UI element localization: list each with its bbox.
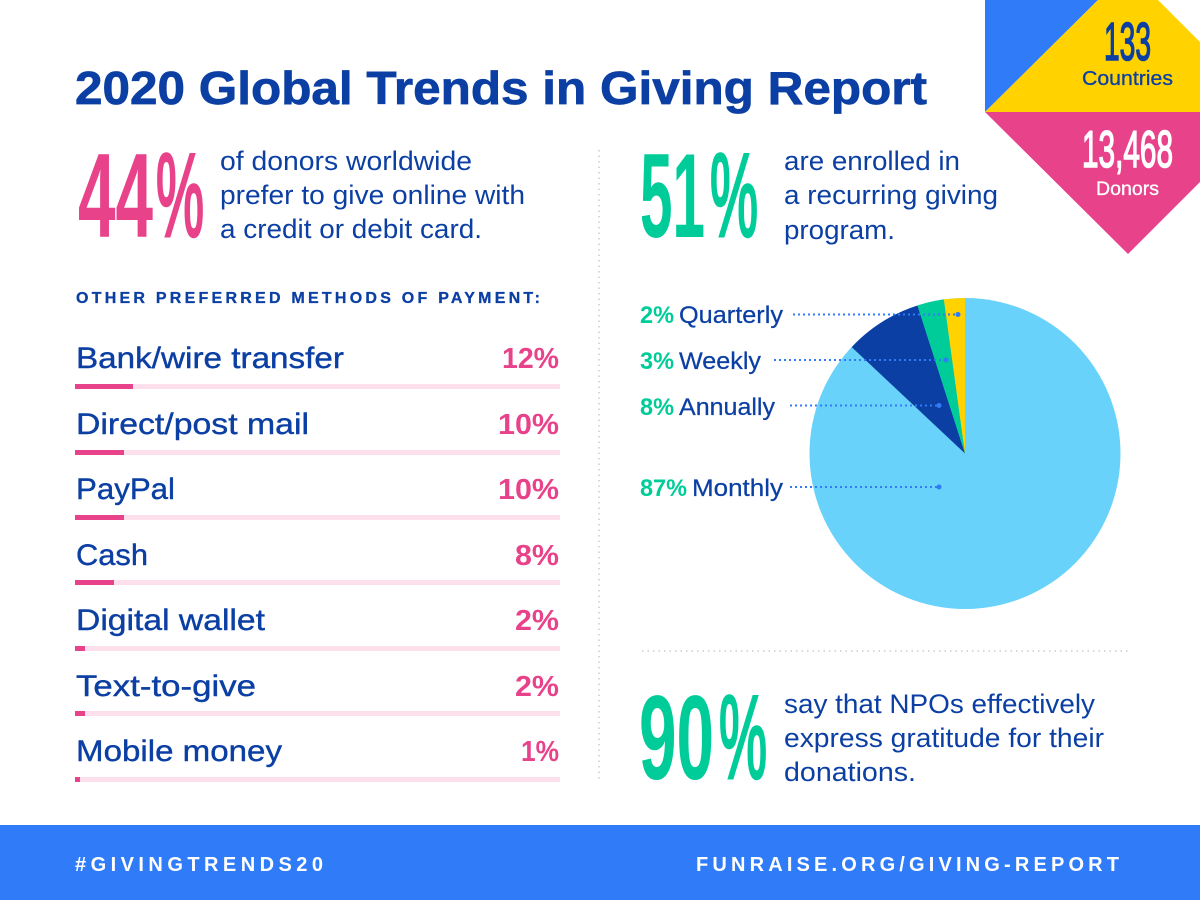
text: gratitude: say that NPOs effectively [784,689,1096,719]
text: online card preference: prefer to give online with [220,180,525,210]
slice: quarterly 2% [944,298,965,454]
row: direct/post mail: Direct/post mail [76,408,309,441]
row: digital wallet: 2% [515,605,559,637]
text: online card preference: a credit or debit card. [220,214,482,244]
row: mobile money: Mobile money [76,735,282,768]
footer bar [0,825,1200,900]
row: digital wallet: Digital wallet [76,604,266,637]
label: donors: Donors [1096,179,1159,200]
text: recurring giving: are enrolled in [784,146,960,176]
text: gratitude: express gratitude for their [784,723,1104,753]
pie chart: giving frequency [810,298,1120,609]
text: gratitude [784,689,1104,787]
stat: 133: 133 [1104,12,1151,72]
text: % [156,130,204,262]
row: bank/wire transfer [75,342,560,389]
corner badge [985,0,1200,254]
row: cash [75,539,560,585]
legend: annually: Annually [679,394,775,421]
legend: quarterly: Quarterly [679,302,783,329]
stat: 51 percent: 51 [640,129,705,263]
title: 2020 Global Trends in Giving Report [75,62,927,114]
row: direct/post mail [75,408,560,455]
hashtag: #GIVINGTRENDS20 [75,854,323,876]
row: cash: Cash [76,539,148,572]
stat: 44 percent: 44 [78,129,153,263]
text: gratitude: donations. [784,757,916,787]
slice: monthly 87% [810,298,1120,609]
yellow countries panel [985,0,1200,112]
row: mobile money: 1% [521,736,559,768]
stat: 90 percent: 90 [639,671,714,805]
legend: weekly: Weekly [679,348,761,375]
text: recurring giving: a recurring giving [784,180,998,210]
legend: annually: 8% [640,394,674,421]
slice: annually 8% [852,306,965,454]
payment method list [75,342,560,782]
legend: annually [640,394,942,421]
legend: weekly: 3% [640,348,674,375]
row: paypal: PayPal [76,473,175,506]
slice: weekly 3% [918,299,965,454]
row: cash: 8% [515,540,559,572]
legend: monthly [640,475,942,502]
row: bank/wire transfer: Bank/wire transfer [76,342,344,375]
legend: monthly: 87% [640,475,687,502]
row: direct/post mail: 10% [498,409,559,441]
text: recurring giving: program. [784,215,895,245]
row: digital wallet [75,604,560,651]
legend: quarterly [640,302,960,329]
heading: payment methods: OTHER PREFERRED METHODS OF PAYMENT: [76,290,540,307]
legend: quarterly: 2% [640,302,674,329]
blue corner triangle [985,0,1098,112]
text: % [710,130,758,262]
row: mobile money [75,735,560,782]
text: online card preference [220,146,525,244]
report url: FUNRAISE.ORG/GIVING-REPORT [696,854,1119,876]
legend: weekly [640,348,948,375]
text: recurring giving [784,146,998,245]
row: text-to-give [75,670,560,716]
label: countries: Countries [1082,68,1173,90]
row: bank/wire transfer: 12% [502,343,559,375]
text: % [719,672,767,804]
row: text-to-give: 2% [515,671,559,703]
pink donors panel [985,112,1200,254]
legend: monthly: Monthly [692,475,783,502]
row: paypal: 10% [498,474,559,506]
row: text-to-give: Text-to-give [76,670,256,703]
text: online card preference: of donors worldwide [220,146,472,176]
row: paypal [75,473,560,520]
